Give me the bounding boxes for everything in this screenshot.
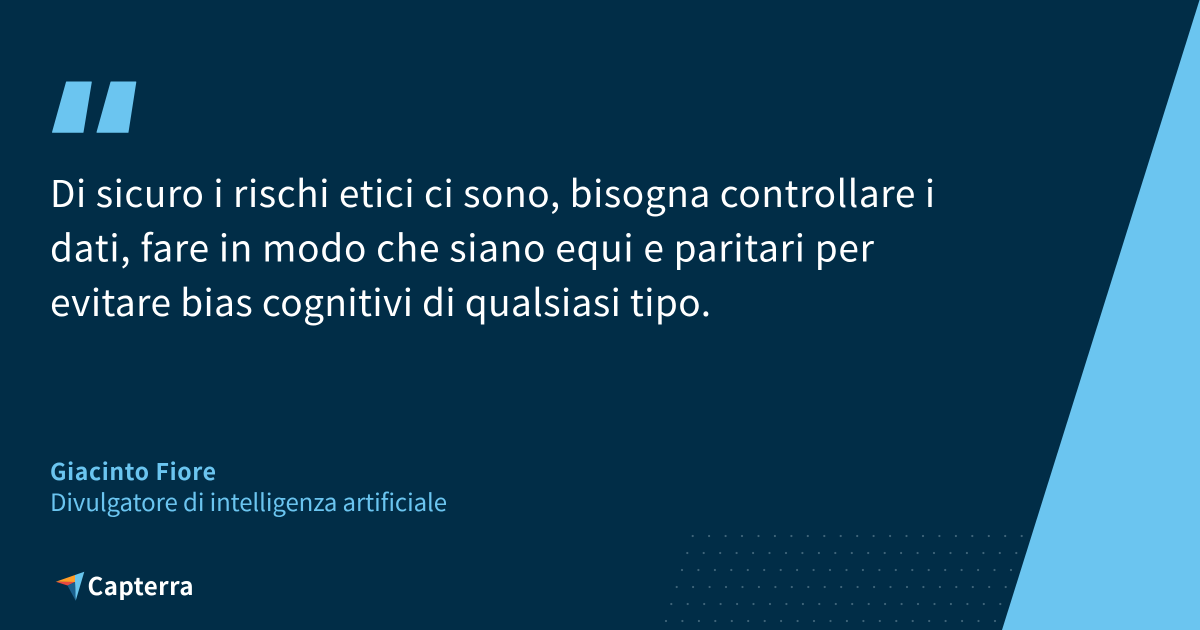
quote text — [50, 164, 935, 327]
author role: Divulgatore di intelligenza artificiale — [50, 483, 447, 518]
icon: quotation mark — [52, 82, 136, 132]
quote text: Di sicuro i rischi etici ci sono, bisogna controllare i — [50, 164, 935, 218]
dot pattern — [665, 535, 1023, 622]
light blue diagonal panel — [1002, 0, 1200, 630]
quote text: dati, fare in modo che siano equi e paritari per — [50, 218, 875, 272]
author name: Giacinto Fiore — [50, 453, 216, 487]
quote text: evitare bias cognitivi di qualsiasi tipo. — [50, 273, 711, 327]
logo: Capterra: Capterra — [88, 567, 194, 602]
